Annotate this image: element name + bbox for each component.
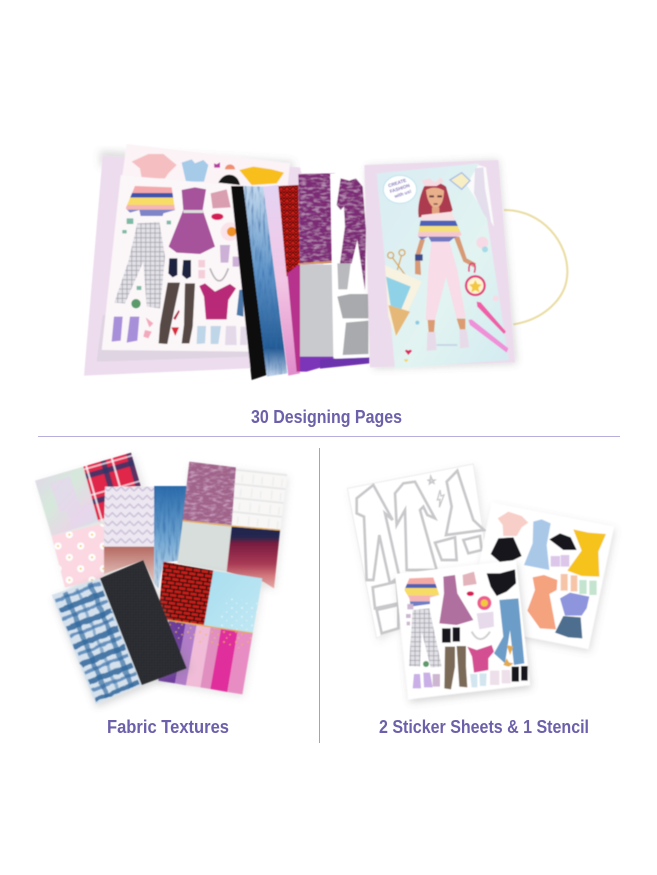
- yellow top sticker: [239, 167, 284, 185]
- sticker sheet: right: [467, 503, 615, 652]
- front lilac cover: [364, 160, 515, 367]
- round bag with star: [466, 263, 485, 295]
- green flower sticker: [131, 299, 141, 308]
- black shoes sticker: [442, 627, 460, 643]
- purple dress sticker: [169, 187, 215, 254]
- shadow: [437, 342, 457, 347]
- coral dress sticker: [527, 575, 557, 629]
- top cutout: [373, 582, 398, 608]
- sheet: opal plaid daisy: [35, 453, 145, 590]
- purple heels sticker: [413, 673, 433, 688]
- confetti circles: [415, 237, 499, 325]
- white corner sticker: [467, 165, 494, 227]
- shorts cutout: [463, 536, 482, 553]
- fabric page: purple fur and grey: [298, 173, 335, 372]
- striped tee sticker: [403, 577, 441, 607]
- purple jumpsuit cutout: [337, 178, 366, 290]
- frame sticker: [450, 173, 470, 189]
- neck: [432, 207, 439, 215]
- black boots sticker: [512, 666, 528, 682]
- brown boots sticker: [444, 646, 467, 689]
- lilac bags sticker: [220, 245, 239, 267]
- panel: open designing book with pages: [84, 144, 347, 380]
- star bag sticker: [477, 596, 491, 610]
- back cover folder: [84, 156, 347, 376]
- striped tee: [417, 210, 463, 243]
- heart icons: [404, 350, 412, 362]
- lilac pencil: [468, 319, 508, 353]
- arms: [415, 237, 476, 275]
- handbag sticker: [463, 572, 477, 586]
- mint boots sticker: [579, 580, 597, 595]
- wrist bands: [415, 254, 423, 261]
- sneakers: [427, 329, 469, 351]
- lips sticker: [211, 213, 223, 220]
- denim shorts sticker: [555, 616, 582, 638]
- lower legs: [428, 319, 465, 333]
- white stencil page: [330, 171, 369, 358]
- black shoes sticker: [168, 258, 191, 279]
- face: [426, 188, 444, 209]
- pale sneakers sticker: [470, 673, 487, 687]
- lilac heels sticker: [551, 555, 569, 567]
- sticker sheet: back: [121, 144, 290, 197]
- heading: 30 Designing Pages: 30 Designing Pages: [251, 407, 402, 427]
- pink accessories sticker: [198, 260, 205, 278]
- heading: Fabric Textures: Fabric Textures: [107, 717, 229, 737]
- pink tee sticker: [132, 154, 177, 178]
- tie dye pattern: [54, 580, 140, 702]
- sheet: tie dye and black: [52, 560, 190, 707]
- grey trouser leg cutout: [337, 263, 351, 289]
- front cover shadow: [367, 160, 517, 368]
- sheet: fur ruffle grey burgundy: [177, 462, 288, 590]
- plaid trousers sticker: [114, 222, 165, 308]
- pink tee sticker: [498, 512, 528, 536]
- black skirt sticker: [491, 537, 522, 565]
- jeans sliver: [237, 289, 243, 317]
- small gems: [122, 218, 171, 290]
- skirt cutout: [435, 537, 457, 560]
- dress cutout: [446, 471, 484, 535]
- bunny shoes sticker: [490, 670, 511, 685]
- divider: vertical: [319, 448, 320, 743]
- fabric page: red knit: [278, 185, 300, 277]
- sheet: red knit aqua pink stripes: [158, 562, 263, 697]
- stencil sheet: [347, 464, 490, 642]
- panel: fabric textures: [35, 453, 288, 707]
- divider: horizontal: [38, 436, 620, 437]
- outfit cutout: [395, 482, 437, 570]
- girl figure: [415, 177, 476, 351]
- scissors icon: [388, 250, 406, 276]
- purple bottom strip: [320, 357, 369, 369]
- eyes and mouth: [429, 195, 442, 205]
- pink top sticker: [199, 283, 236, 319]
- fabric page: pink holographic: [263, 185, 300, 376]
- yellow outfit sticker: [567, 529, 606, 577]
- grey top cutout: [337, 294, 368, 318]
- necklace sticker: [210, 268, 228, 281]
- star and bolt cutouts: [427, 476, 444, 507]
- pink trousers: [426, 242, 466, 320]
- sticker sheet: front: [395, 560, 532, 703]
- speech bubble text: CREATE: [388, 178, 407, 188]
- lower cutout: [377, 605, 398, 633]
- panel: stencil page and cover card: [320, 160, 567, 369]
- heading: 2 Sticker Sheets & 1 Stencil: 2 Sticker Sheets & 1 Stencil: [379, 717, 589, 737]
- crown sticker: [214, 162, 220, 168]
- cover card: [377, 163, 509, 369]
- jumpsuit cutout: [357, 485, 399, 583]
- rainbow sticker: [225, 164, 235, 169]
- sticker sheet: front: [102, 175, 248, 352]
- corner trousers: [474, 167, 492, 225]
- fabric page: black: [231, 186, 267, 380]
- speech bubble: [383, 175, 417, 203]
- green flower sticker: [423, 661, 429, 667]
- black hat sticker: [549, 533, 577, 550]
- round star bag sticker: [221, 222, 239, 241]
- handle: gold cord: [504, 210, 567, 324]
- lips sticker: [467, 591, 474, 596]
- pink stripes: [158, 621, 253, 694]
- necklace sticker: [472, 632, 490, 639]
- blue top sticker: [560, 593, 589, 616]
- fabric page: magenta glitter: [287, 263, 300, 372]
- underlay film: [97, 315, 250, 362]
- blue sneakers sticker: [197, 326, 221, 344]
- stencil card icon: [385, 265, 422, 337]
- bunny sneakers sticker: [225, 326, 247, 345]
- sheet: herringbone rose blue: [104, 486, 187, 588]
- opal patches: [50, 477, 95, 527]
- striped tee sticker: [123, 185, 177, 217]
- peach sandals sticker: [561, 574, 577, 591]
- speech bubble text: with us!: [393, 189, 412, 199]
- strawberry sticker: [171, 327, 179, 336]
- skinny jeans sticker: [494, 598, 524, 665]
- speech bubble text: FASHION: [389, 183, 411, 194]
- small gems: [406, 604, 440, 687]
- grey skirt cutout: [343, 321, 368, 355]
- hair: [418, 182, 453, 217]
- hair buns: [422, 177, 444, 186]
- black tee sticker: [487, 569, 516, 596]
- lilac accessories sticker: [477, 612, 494, 629]
- pink sunglasses sticker: [143, 317, 153, 338]
- pink top sticker: [467, 645, 494, 673]
- purple boots sticker: [112, 317, 139, 343]
- fabric page: blue wash: [243, 186, 287, 377]
- stockings sticker: [159, 283, 195, 344]
- mauve dress sticker: [439, 575, 473, 625]
- lipstick sticker: [173, 310, 180, 320]
- folder shadow: [100, 151, 293, 173]
- aqua sparkles: [217, 597, 260, 633]
- pink pencil: [477, 302, 506, 334]
- plaid trousers sticker: [409, 608, 442, 667]
- star and flower stickers: [503, 645, 513, 667]
- blue shirt sticker: [182, 159, 208, 182]
- handbag sticker: [211, 189, 231, 208]
- black hat sticker: [218, 175, 240, 185]
- panel: sticker sheets and stencil: [347, 464, 615, 703]
- denim dress sticker: [524, 519, 551, 570]
